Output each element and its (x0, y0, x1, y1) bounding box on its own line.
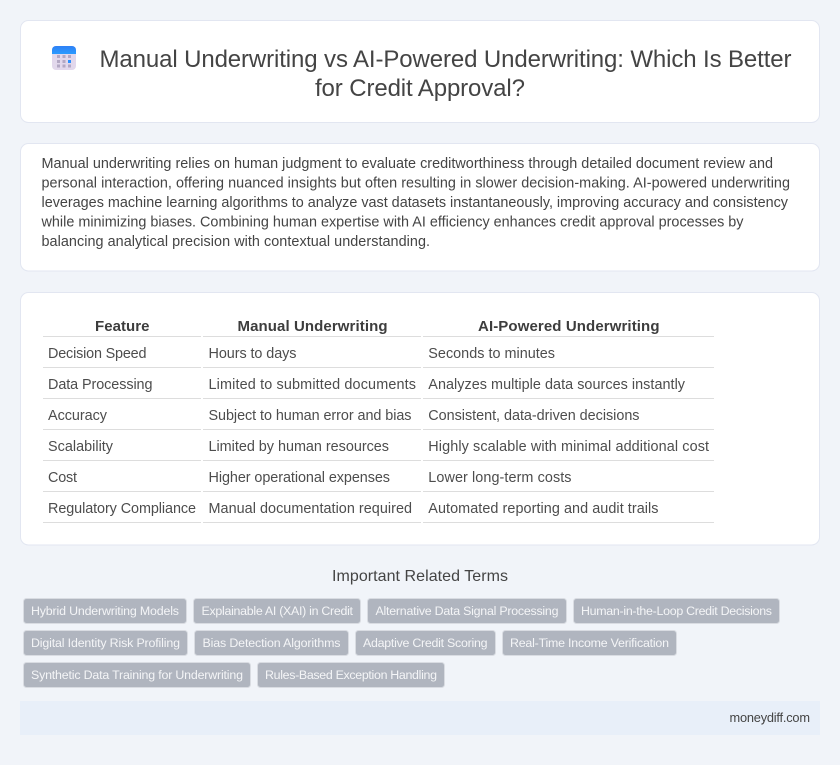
tag: Digital Identity Risk Profiling: Digital Identity Risk Profiling (31, 636, 180, 650)
table header row: Manual Underwriting (238, 318, 388, 335)
row: Decision Speed: Hours to days (208, 346, 296, 362)
tag: Synthetic Data Training for Underwriting (24, 662, 250, 688)
row: Data Processing (43, 377, 714, 399)
tag: Bias Detection Algorithms (194, 630, 348, 656)
header panel (20, 20, 820, 122)
row: Accuracy (43, 408, 714, 430)
row: Scalability: Limited by human resources (208, 439, 389, 455)
intro paragraph (40, 156, 790, 250)
row: Cost (43, 470, 714, 492)
intro paragraph: personal interaction, offering nuanced insights but often resulting in slower decision-making. AI-powered underwriting (42, 176, 790, 192)
tag: Real-Time Income Verification: Real-Time Income Verification (510, 636, 669, 650)
intro paragraph: Manual underwriting relies on human judgment to evaluate creditworthiness through detailed document review and (42, 156, 773, 172)
icon: calendar (52, 46, 76, 70)
intro paragraph: while minimizing biases. Combining human expertise with AI efficiency enhances credit approval processes by (40, 214, 744, 230)
tag: Synthetic Data Training for Underwriting: Synthetic Data Training for Underwriting (31, 668, 243, 682)
footer source text: moneydiff.com (730, 710, 810, 725)
tag: Alternative Data Signal Processing: Alternative Data Signal Processing (376, 604, 559, 618)
intro paragraph: balancing analytical precision with contextual understanding. (42, 234, 430, 250)
row: Regulatory Compliance (43, 501, 714, 523)
tag: Bias Detection Algorithms: Bias Detection Algorithms (202, 636, 340, 650)
tag: Hybrid Underwriting Models (24, 598, 186, 624)
intro paragraph: leverages machine learning algorithms to analyze vast datasets instantaneously, improving accuracy and consistency (42, 195, 789, 211)
row: Data Processing: Limited to submitted documents (208, 377, 416, 393)
row: Accuracy: Accuracy (48, 408, 108, 424)
footer bar (20, 701, 820, 735)
row: Regulatory Compliance: Regulatory Compliance (48, 501, 196, 517)
row: Cost: Lower long-term costs (428, 470, 572, 486)
tag: Real-Time Income Verification (502, 630, 676, 656)
panel: comparison table (20, 292, 820, 545)
tag: Rules-Based Exception Handling (258, 662, 444, 688)
row: Accuracy: Consistent, data-driven decisions (428, 408, 640, 424)
heading: important related terms: Important Related Terms (332, 568, 508, 585)
tag: Human-in-the-Loop Credit Decisions: Human-in-the-Loop Credit Decisions (581, 604, 772, 618)
title: Manual Underwriting vs AI-Powered Underwriting: Which Is Better (100, 46, 792, 73)
title: for Credit Approval? (315, 75, 525, 102)
title (100, 46, 792, 102)
tag: Explainable AI (XAI) in Credit (194, 598, 360, 624)
tag: Alternative Data Signal Processing (368, 598, 566, 624)
tag: Digital Identity Risk Profiling (24, 630, 188, 656)
row: Scalability: Scalability (48, 439, 114, 455)
table header row: AI-Powered Underwriting (478, 318, 660, 335)
row: Cost: Higher operational expenses (208, 470, 390, 486)
row: Scalability (43, 439, 714, 461)
row: Data Processing: Data Processing (48, 377, 152, 393)
row: Cost: Cost (48, 470, 77, 486)
row: Scalability: Highly scalable with minimal additional cost (428, 439, 709, 455)
row: Accuracy: Subject to human error and bias (208, 408, 412, 424)
panel: introduction (20, 144, 820, 271)
related term tags (24, 598, 780, 688)
tag: Rules-Based Exception Handling: Rules-Based Exception Handling (265, 668, 437, 682)
table header row (43, 318, 714, 337)
row: Regulatory Compliance: Automated reporting and audit trails (428, 501, 658, 517)
tag: Human-in-the-Loop Credit Decisions (574, 598, 780, 624)
tag: Adaptive Credit Scoring: Adaptive Credit Scoring (363, 636, 488, 650)
row: Decision Speed: Decision Speed (48, 346, 146, 362)
tag: Explainable AI (XAI) in Credit: Explainable AI (XAI) in Credit (202, 604, 354, 618)
row: Data Processing: Analyzes multiple data sources instantly (428, 377, 686, 393)
table header row: Feature (95, 318, 150, 335)
tag: Hybrid Underwriting Models: Hybrid Underwriting Models (31, 604, 179, 618)
tag: Adaptive Credit Scoring (356, 630, 496, 656)
row: Regulatory Compliance: Manual documentation required (208, 501, 412, 517)
row: Decision Speed: Seconds to minutes (428, 346, 555, 362)
row: Decision Speed (43, 346, 714, 368)
